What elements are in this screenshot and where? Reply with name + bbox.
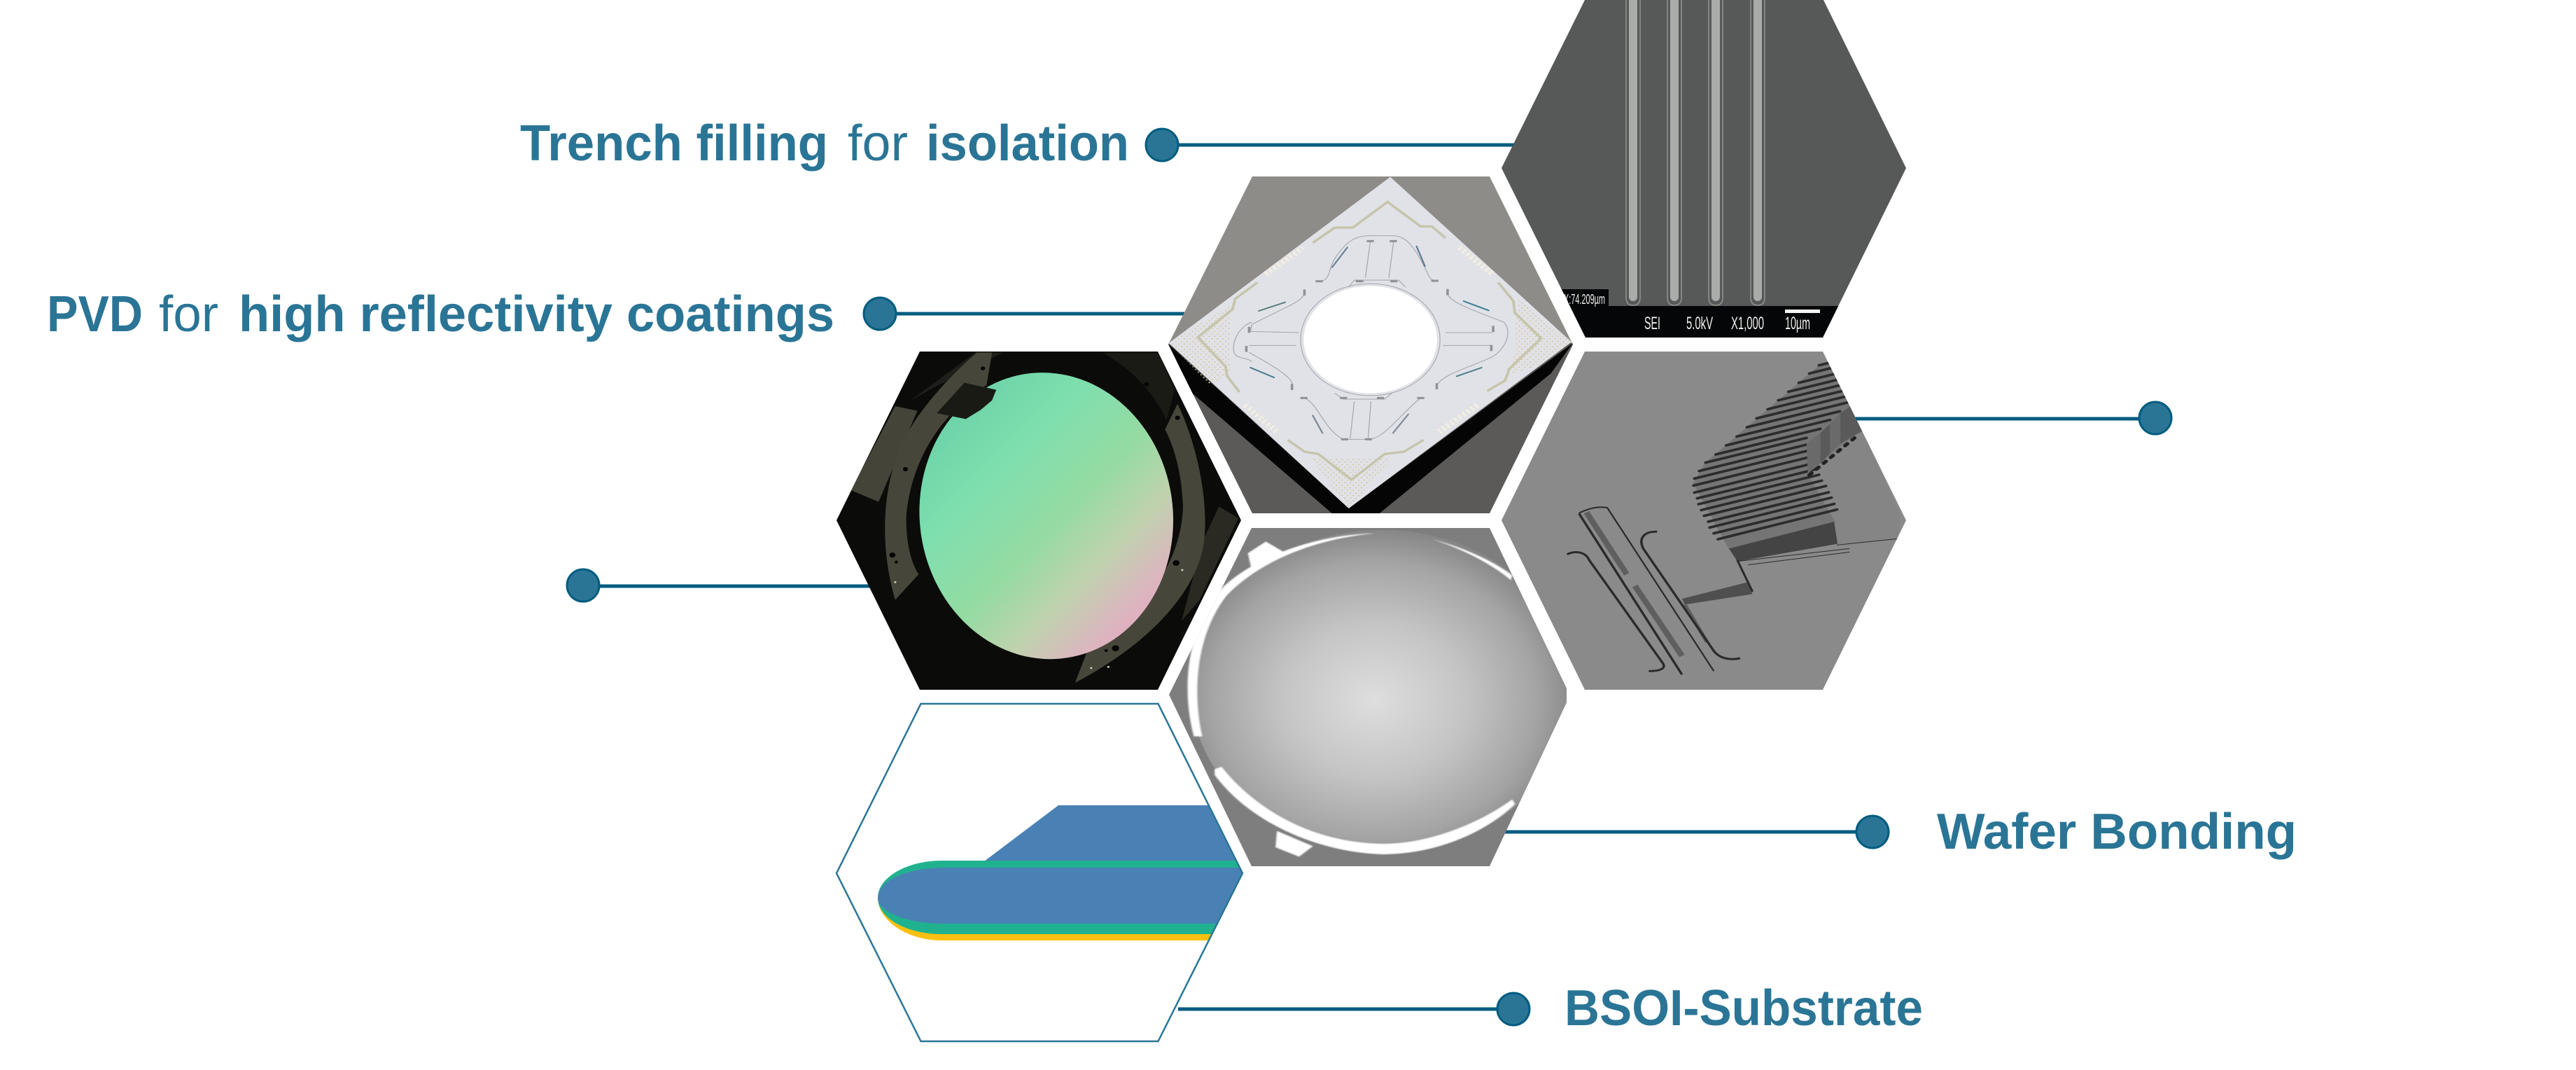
connector: SEM comb image bbox=[1851, 417, 2155, 420]
SEM data bar: 5.0kV bbox=[1686, 314, 1713, 333]
SEM data bar: X:74.209µm bbox=[1564, 292, 1605, 307]
chip side shadow bbox=[1169, 343, 1573, 516]
label: PVD for high reflectivity coatings: PVD bbox=[47, 286, 143, 342]
trench lines bbox=[1626, 0, 1765, 305]
chip body bbox=[1169, 177, 1572, 508]
comb fingers bbox=[1693, 357, 1900, 565]
panel: bonded wafer hexagon bbox=[1169, 518, 1603, 868]
SEM data bar: SEI bbox=[1644, 314, 1660, 333]
central aperture bbox=[1303, 286, 1437, 394]
electrode blocks bbox=[1246, 241, 1493, 439]
SEM data bar bbox=[1561, 289, 1838, 338]
label: BSOI substrate: BSOI-Substrate bbox=[1564, 980, 1923, 1036]
label: trench filling for isolation bbox=[520, 116, 1129, 172]
white bond rim arcs bbox=[1188, 534, 1515, 856]
label: trench filling for isolation: Trench filling bbox=[520, 116, 828, 172]
marker: BSOI substrate bbox=[1497, 993, 1530, 1025]
connector: PVD bbox=[880, 312, 1188, 315]
marker: SEM comb image bbox=[2139, 402, 2171, 434]
connector: BSOI substrate bbox=[1178, 1007, 1513, 1011]
connector: wafer image bbox=[583, 584, 874, 588]
anchor beam and hooks bbox=[1567, 507, 1753, 674]
corner bond pad fields bbox=[1169, 299, 1572, 508]
panel: BSOI substrate hexagon bbox=[836, 704, 1260, 1041]
label: PVD for high reflectivity coatings: for bbox=[159, 286, 218, 342]
panel: comb drive SEM hexagon bbox=[1491, 343, 1925, 693]
substrate cross section bbox=[878, 805, 1260, 940]
panel: trench SEM hexagon bbox=[1498, 0, 1911, 340]
grey wafer disc bbox=[1191, 530, 1573, 852]
spring traces bbox=[1233, 236, 1508, 439]
mounting holes bbox=[890, 366, 1180, 652]
SEM data bar: X1,000 bbox=[1731, 314, 1764, 333]
perimeter trace bbox=[1198, 202, 1541, 480]
label: PVD for high reflectivity coatings: high reflectivity coatings bbox=[239, 286, 834, 342]
marker: PVD bbox=[864, 298, 896, 330]
marker: trench filling bbox=[1146, 129, 1178, 161]
connector: wafer bonding bbox=[1505, 831, 1872, 833]
stepped comb side walls bbox=[1807, 405, 1863, 473]
green-pink wafer bbox=[911, 367, 1182, 665]
label: wafer bonding: Wafer Bonding bbox=[1937, 804, 2297, 860]
marker: wafer image bbox=[567, 569, 599, 602]
label: trench filling for isolation: isolation bbox=[926, 116, 1129, 172]
SEM data bar: 10µm bbox=[1785, 314, 1810, 333]
holder ring segments bbox=[851, 352, 1238, 683]
panel: mirror chip hexagon bbox=[1168, 176, 1573, 513]
label: trench filling for isolation: for bbox=[848, 116, 908, 172]
connector: trench filling bbox=[1162, 143, 1519, 147]
wafer flat notch bbox=[937, 383, 996, 419]
marker: wafer bonding bbox=[1856, 816, 1889, 848]
contact pads bbox=[1245, 247, 1492, 433]
panel: coated wafer hexagon bbox=[826, 343, 1260, 693]
centre ring bbox=[1301, 284, 1440, 396]
iridescent strips bbox=[1250, 246, 1488, 433]
